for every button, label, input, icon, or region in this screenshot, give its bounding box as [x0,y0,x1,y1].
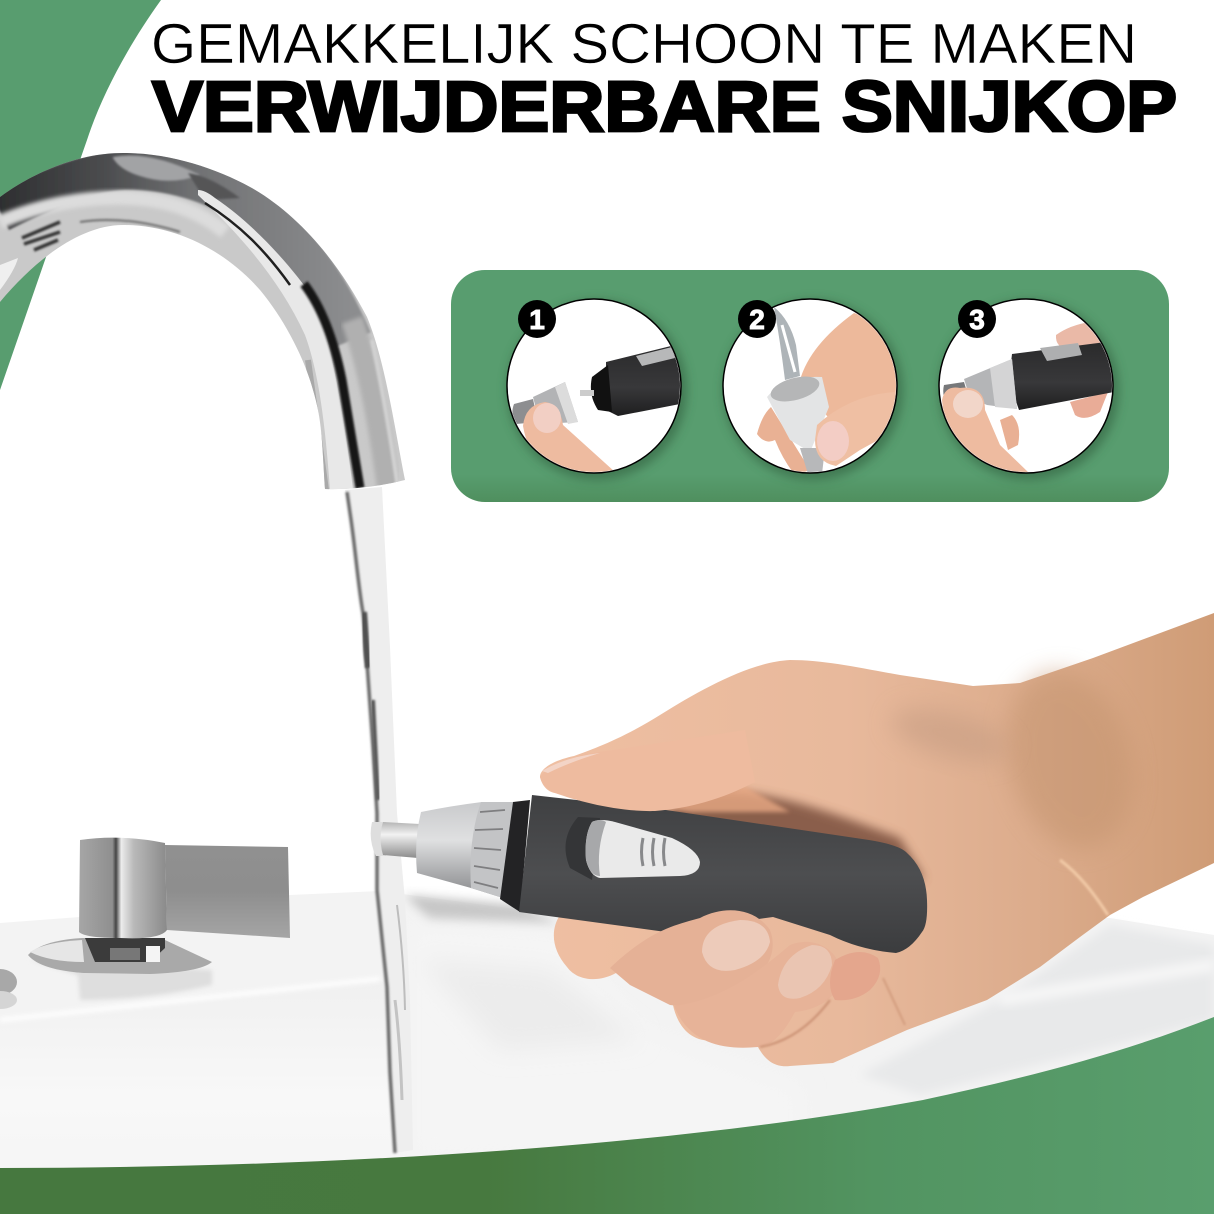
silver collar [416,802,513,898]
badge 1: 1 [529,304,545,335]
switch recess [566,817,600,880]
badge 2 [738,300,776,338]
panel background [451,270,1169,502]
finger shadow lines [760,1000,830,1047]
title line one: GEMAKKELIJK SCHOON TE MAKEN [151,12,1137,76]
ring finger [830,952,880,1000]
bottom green wave [0,1017,1214,1214]
handle body [519,795,927,953]
nose trimmer device [380,795,927,953]
lever [165,845,290,938]
thumb [540,730,755,811]
switch button [586,820,700,878]
badge 3: 3 [969,304,985,335]
faucet handle [0,838,290,1009]
title line two: VERWIJDERBARE SNIJKOP [152,68,1177,147]
step 3 [939,299,1114,480]
step 2 [723,299,900,475]
water stream [345,487,413,1153]
badge 1 [518,300,556,338]
sink [0,891,1214,1214]
shadow above device [670,792,925,880]
handle reflection [30,960,212,1000]
faucet spout [0,153,405,490]
index finger [610,910,773,1006]
blade shaft [380,822,420,858]
hand [540,613,1214,1066]
wrist crease [1060,860,1108,915]
cylinder [79,838,167,938]
step 1 [507,299,690,480]
palm and arm [540,613,1214,1066]
badge 3 [958,300,996,338]
green corner shape top left [0,0,161,390]
wrist shadow [989,658,1151,862]
hand fingers in front of device [540,730,905,1048]
circle shadows [507,300,687,480]
black ring [500,800,530,912]
handle base [28,938,212,974]
side knob [0,969,17,995]
panel: cleaning steps [451,270,1169,502]
gap palm light [660,786,790,812]
middle finger [674,942,842,1048]
badge 2: 2 [749,304,765,335]
